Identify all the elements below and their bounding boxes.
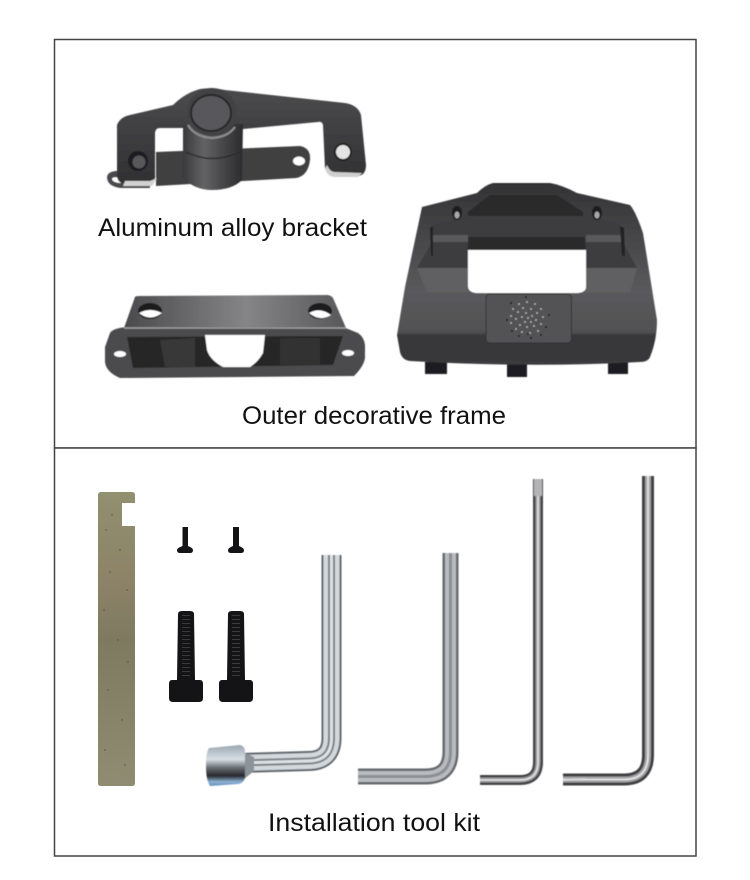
label: installation tool kit: Installation tool kit [268,809,480,837]
tabs [425,362,628,377]
label: outer decorative frame: Outer decorative frame [242,402,506,430]
small screws [177,527,244,553]
hex L key [358,553,450,776]
aluminum alloy bracket [107,88,366,190]
speaker dots [510,301,544,334]
panel: tool kit frame [54,448,696,856]
small torx L key [480,479,542,780]
large socket head bolts [169,611,253,702]
outer frame main piece [397,183,657,377]
panel: upper parts frame [54,40,696,448]
large torx L key [563,476,648,780]
flat metal wrench bar [98,492,135,786]
outer frame lower piece [105,295,365,378]
label: aluminum alloy bracket: Aluminum alloy bracket [98,214,367,242]
socket L wrench [206,555,332,786]
